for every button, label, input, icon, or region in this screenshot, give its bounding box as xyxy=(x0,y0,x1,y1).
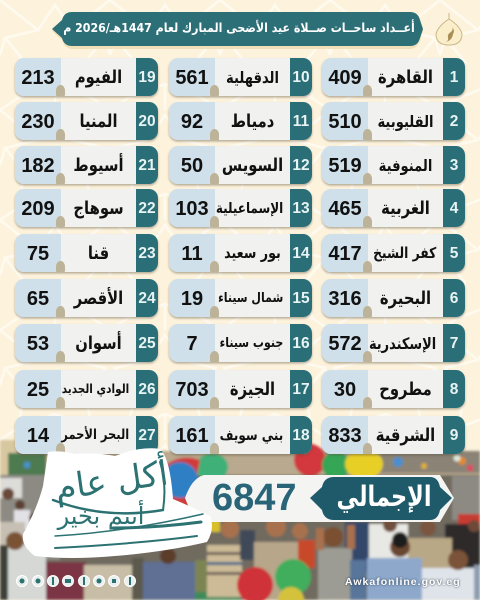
row 17: 703 xyxy=(175,379,209,401)
row 13: 13 xyxy=(292,200,310,217)
row 15 xyxy=(169,279,312,317)
row 24: الأقصر xyxy=(74,288,123,309)
row 1: 1 xyxy=(450,69,458,86)
table column: governorates 10 to 18 xyxy=(168,58,314,456)
row 2 xyxy=(322,102,465,140)
row 9: 833 xyxy=(328,425,362,447)
row 26: 26 xyxy=(138,381,156,398)
row 11 xyxy=(169,102,312,140)
row 19 xyxy=(15,58,158,96)
row 27: 27 xyxy=(138,427,156,444)
row 19: 19 xyxy=(138,69,156,86)
title: أعــداد ساحــات صــلاة عيد الأضحى المبارك لعام 1447هـ/2026 م xyxy=(63,21,415,36)
row 18 xyxy=(169,416,312,454)
icon: ministry logo xyxy=(436,13,462,46)
row 7 xyxy=(322,324,465,362)
row 23 xyxy=(15,234,158,272)
sticker: Eid greeting calligraphy: أكل عام xyxy=(52,450,171,509)
row 25: 25 xyxy=(138,335,156,352)
row 16: 16 xyxy=(292,335,310,352)
total value: 6847 xyxy=(212,477,297,519)
row 6 xyxy=(322,279,465,317)
row 4: الغربية xyxy=(381,198,430,219)
row 27: البحر الأحمر xyxy=(61,427,129,443)
row 10: الدقهلية xyxy=(226,68,279,87)
row 24 xyxy=(15,279,158,317)
row 22: سوهاج xyxy=(73,198,124,219)
row 25 xyxy=(15,324,158,362)
row 3: المنوفية xyxy=(379,156,432,175)
row 27: 14 xyxy=(27,425,49,447)
row 22 xyxy=(15,189,158,227)
row 27 xyxy=(15,416,158,454)
row 21: 182 xyxy=(21,155,55,177)
row 14: 14 xyxy=(292,245,310,262)
row 14: بور سعيد xyxy=(224,244,281,262)
row 26 xyxy=(15,370,158,408)
row 6: 6 xyxy=(450,290,458,307)
row 5: 417 xyxy=(328,243,362,265)
row 15: 19 xyxy=(181,288,203,310)
table column: governorates 19 to 27 xyxy=(14,58,160,456)
row 23: 23 xyxy=(138,245,156,262)
row 7: 7 xyxy=(450,335,458,352)
row 21: أسيوط xyxy=(73,155,124,176)
row 6: البحيرة xyxy=(380,288,431,309)
row 20: 230 xyxy=(21,111,55,133)
row 23: 75 xyxy=(27,243,49,265)
row 10 xyxy=(169,58,312,96)
row 26: 25 xyxy=(27,379,49,401)
row 4 xyxy=(322,189,465,227)
row 9: الشرقية xyxy=(376,425,435,446)
website address: Awkafonline.gov.eg xyxy=(345,576,461,588)
row 14 xyxy=(169,234,312,272)
row 8 xyxy=(322,370,465,408)
row 2: 2 xyxy=(450,113,458,130)
title banner shape xyxy=(52,12,423,49)
row 18: بني سويف xyxy=(220,427,283,444)
row 9 xyxy=(322,416,465,454)
row 2: 510 xyxy=(328,111,362,133)
row 8: 30 xyxy=(334,379,356,401)
total label: الإجمالي xyxy=(336,480,432,513)
row 4: 465 xyxy=(328,198,362,220)
row 20: 20 xyxy=(138,113,156,130)
row 21 xyxy=(15,146,158,184)
sticker: Eid greeting calligraphy xyxy=(22,448,212,558)
row 24: 24 xyxy=(138,290,156,307)
row 23: قنا xyxy=(88,243,109,264)
row 9: 9 xyxy=(450,427,458,444)
row 12 xyxy=(169,146,312,184)
row 17: الجيزة xyxy=(230,379,275,400)
row 15: 15 xyxy=(292,290,310,307)
row 13: 103 xyxy=(175,198,209,220)
row 20: المنيا xyxy=(79,111,118,132)
row 1 xyxy=(322,58,465,96)
row 10: 10 xyxy=(292,69,310,86)
row 1: 409 xyxy=(328,67,362,89)
row 5: كفر الشيخ xyxy=(373,244,436,262)
row 12: 12 xyxy=(292,157,310,174)
row 15: شمال سيناء xyxy=(218,291,283,306)
row 10: 561 xyxy=(175,67,209,89)
row 17: 17 xyxy=(292,381,310,398)
row 3: 3 xyxy=(450,157,458,174)
row 11: 92 xyxy=(181,111,203,133)
row 19: الفيوم xyxy=(75,67,122,88)
sticker: Eid greeting calligraphy: أنتم بخير xyxy=(57,500,144,530)
row 4: 4 xyxy=(450,200,458,217)
row 14: 11 xyxy=(181,243,203,265)
row 18: 18 xyxy=(292,427,310,444)
row 25: أسوان xyxy=(75,333,122,354)
row 24: 65 xyxy=(27,288,49,310)
row 12: السويس xyxy=(222,155,283,176)
row 7: 572 xyxy=(328,333,362,355)
row 8: 8 xyxy=(450,381,458,398)
row 13 xyxy=(169,189,312,227)
row 11: 11 xyxy=(293,113,309,130)
row 21: 21 xyxy=(138,157,156,174)
row 7: الإسكندرية xyxy=(369,334,436,353)
row 13: الإسماعيلية xyxy=(216,200,283,217)
row 16: جنوب سيناء xyxy=(220,336,283,351)
row 26: الوادي الجديد xyxy=(62,382,129,397)
row 20 xyxy=(15,102,158,140)
row 12: 50 xyxy=(181,155,203,177)
row 5 xyxy=(322,234,465,272)
row 22: 22 xyxy=(138,200,156,217)
table column: governorates 1 to 9 xyxy=(320,58,466,457)
row 3: 519 xyxy=(328,155,362,177)
row 19: 213 xyxy=(21,67,55,89)
row 8: مطروح xyxy=(379,379,432,400)
row 2: القليوبية xyxy=(377,112,434,131)
row 11: دمياط xyxy=(231,111,274,132)
row 18: 161 xyxy=(175,425,209,447)
row 6: 316 xyxy=(328,288,362,310)
row 5: 5 xyxy=(450,245,458,262)
row 1: القاهرة xyxy=(378,67,433,88)
row 16: 7 xyxy=(186,333,198,355)
row 22: 209 xyxy=(21,198,55,220)
row 17 xyxy=(169,370,312,408)
row 16 xyxy=(169,324,312,362)
row 3 xyxy=(322,146,465,184)
row 25: 53 xyxy=(27,333,49,355)
